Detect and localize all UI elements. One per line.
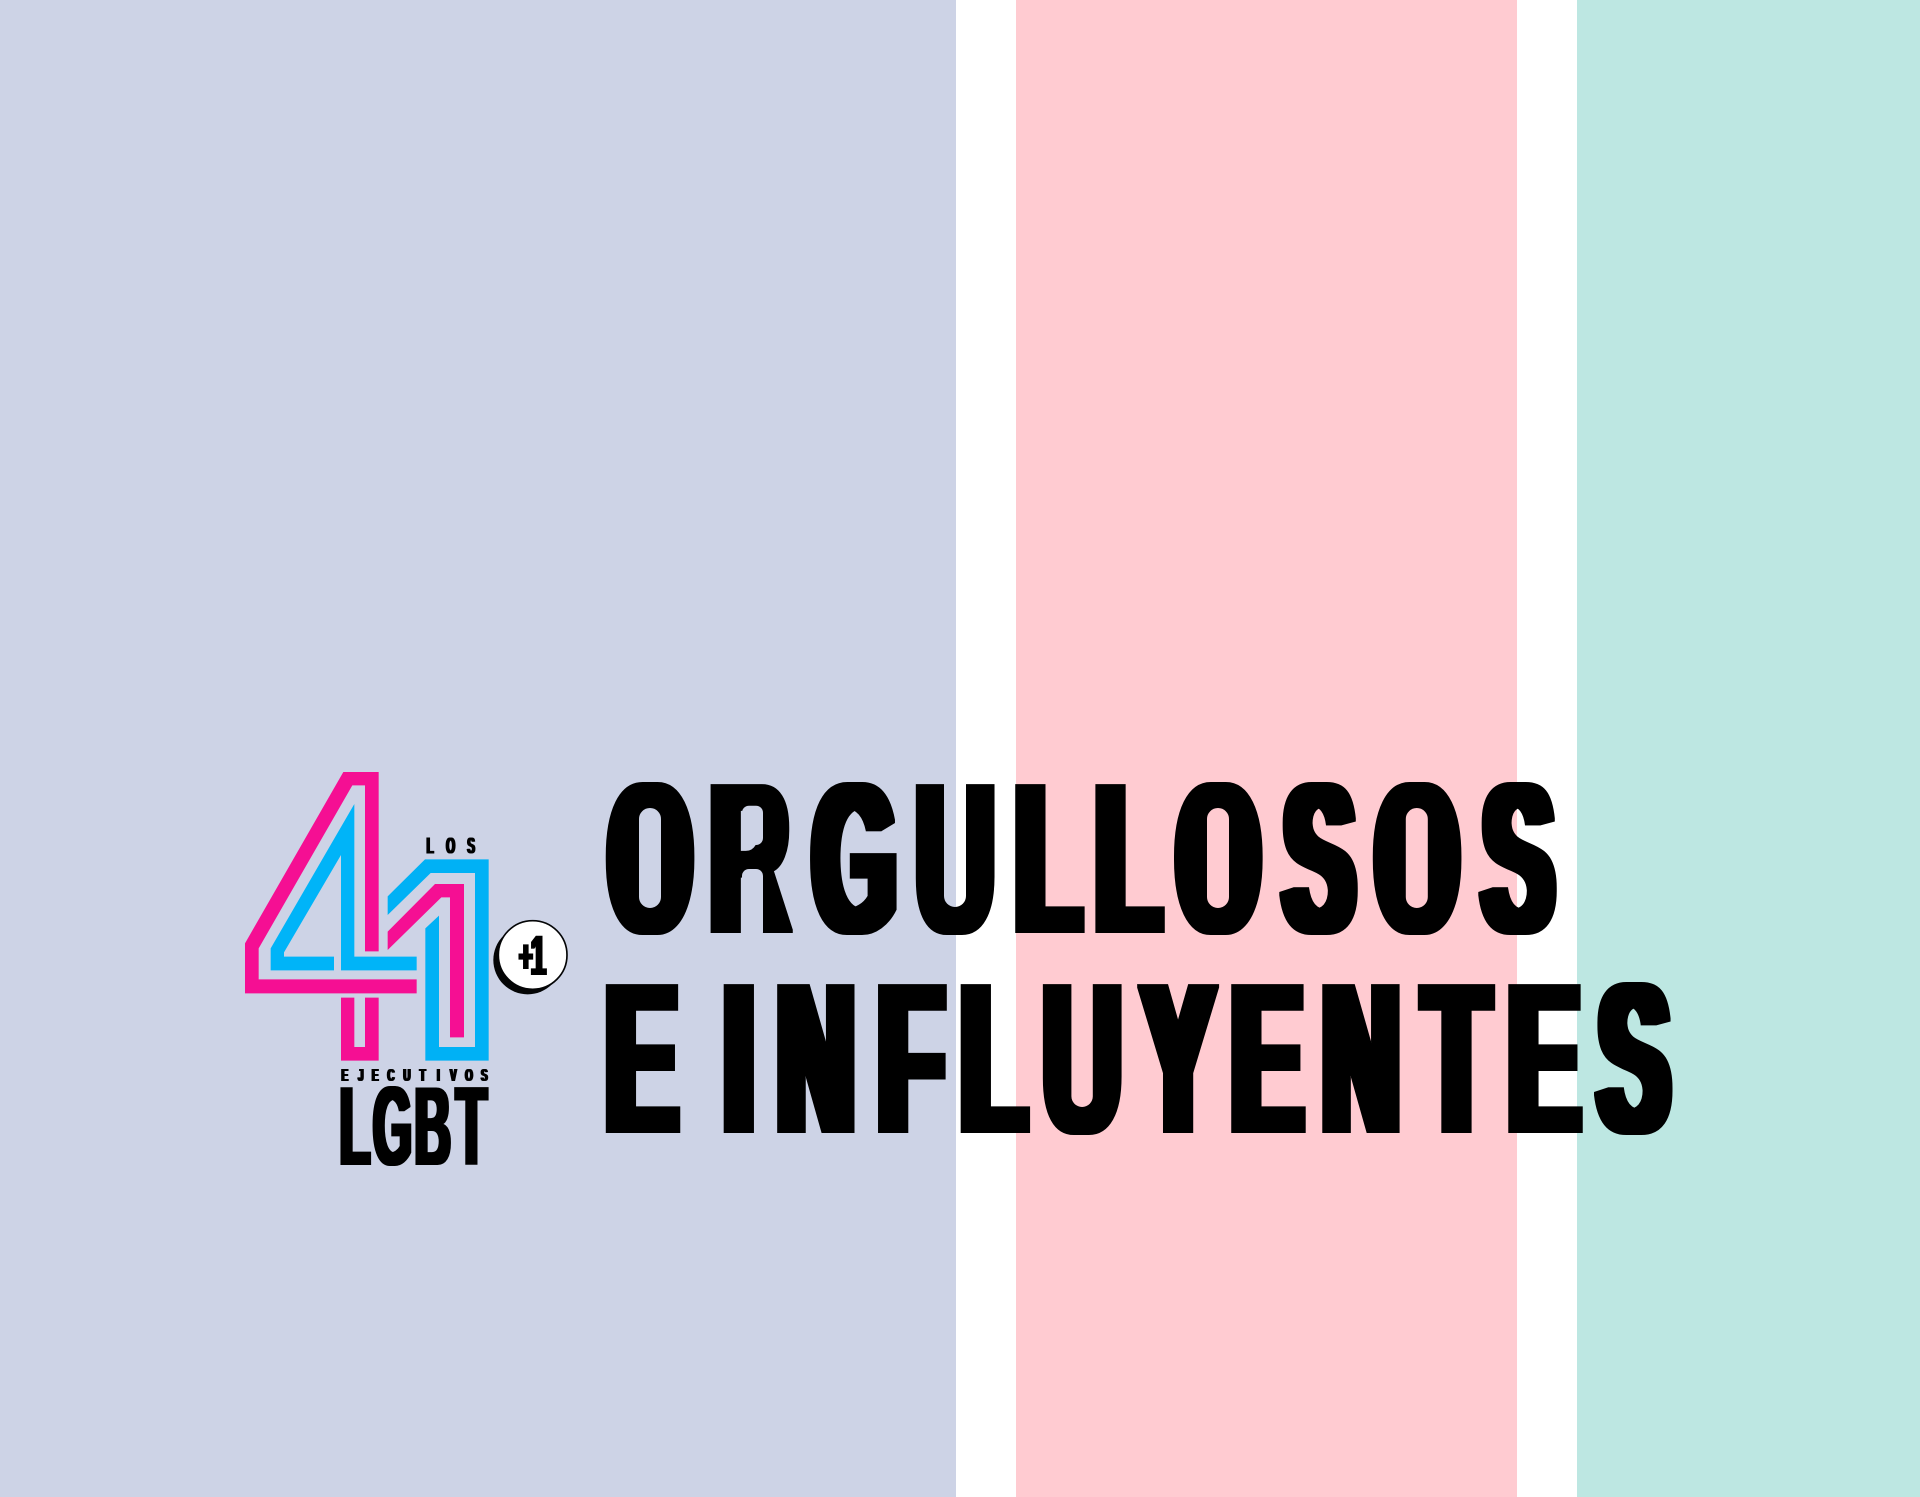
panel: lavender stripe	[0, 0, 956, 1497]
title line 1: ORGULLOSOS	[609, 739, 1553, 977]
text: EJECUTIVOS: EJECUTIVOS	[342, 1066, 488, 1086]
icon: blue inner line of the number 4	[271, 804, 417, 970]
icon: +1 badge: +1	[519, 925, 546, 987]
icon: pink foot of the number 4	[341, 998, 379, 1061]
icon: +1 badge	[493, 921, 567, 994]
icon: pink outline of the number 4	[245, 772, 417, 993]
text: LGBT: LGBT	[340, 1065, 487, 1189]
logo: Los 41 +1 Ejecutivos LGBT	[245, 772, 567, 1189]
title line 2: E INFLUYENTES	[606, 939, 1669, 1177]
icon: blue outline of the number 1	[388, 859, 489, 1061]
icon: pink inner line of the number 1	[388, 884, 464, 1037]
panel: teal stripe	[1577, 0, 1920, 1497]
panel: pink stripe	[1016, 0, 1517, 1497]
title	[606, 739, 1669, 1177]
text: LOS: LOS	[427, 833, 475, 858]
